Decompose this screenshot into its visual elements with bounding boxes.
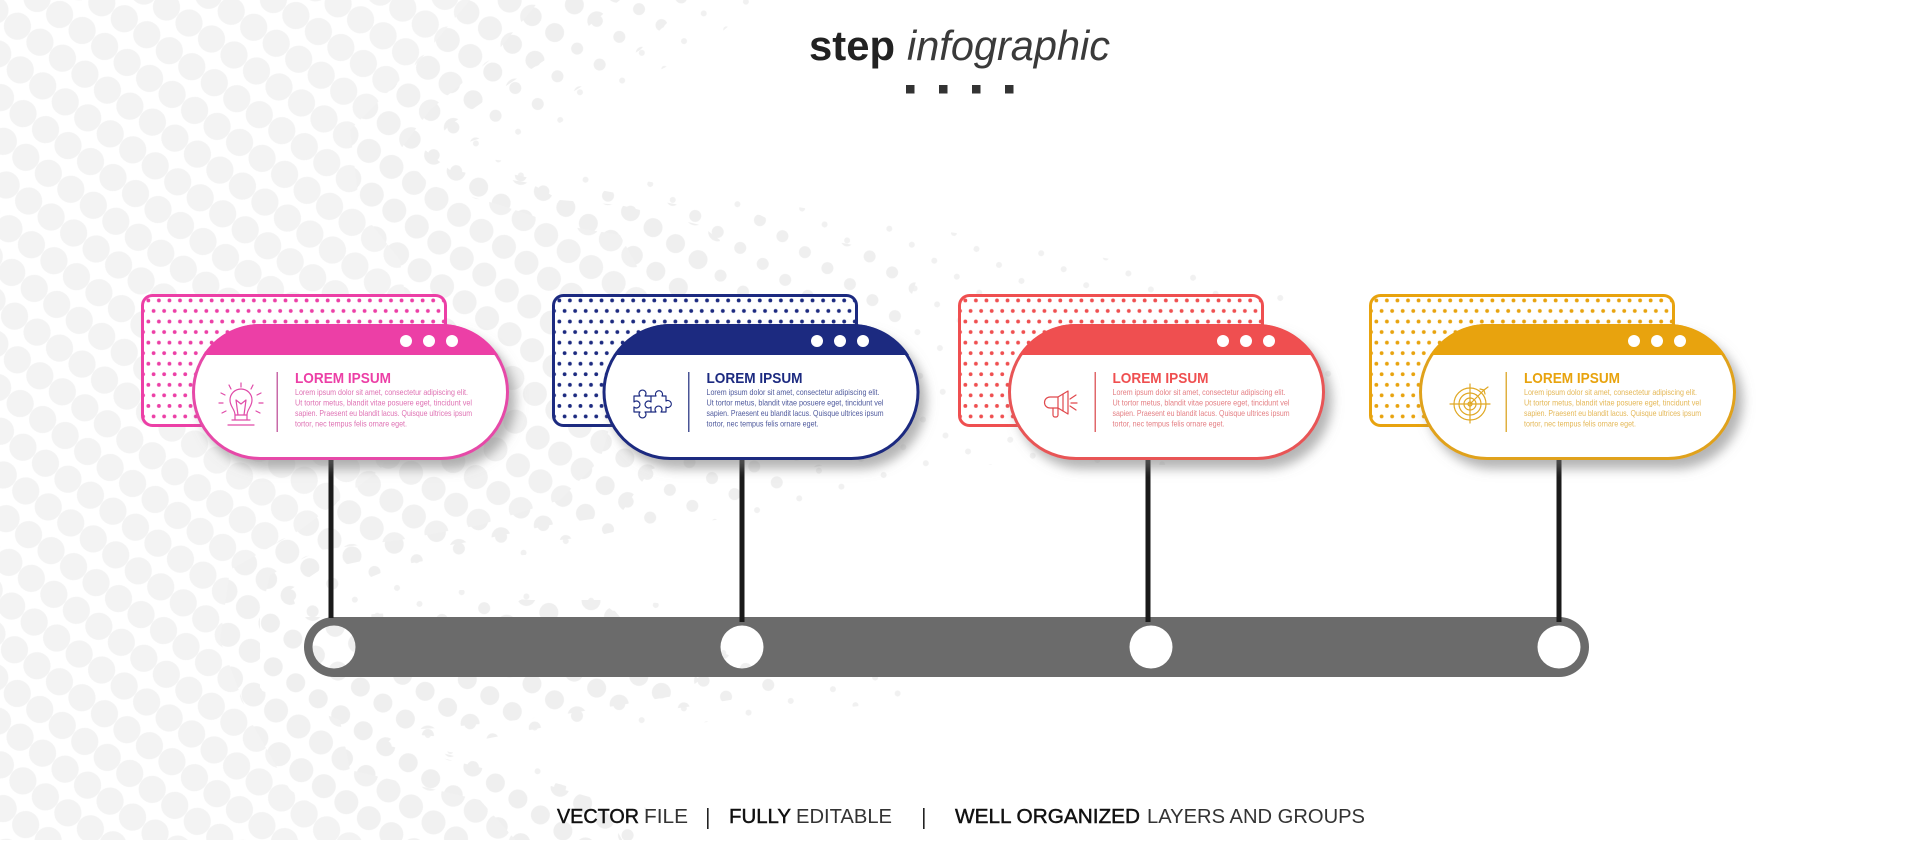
window header <box>1430 324 1725 355</box>
footer tagline: VECTOR <box>557 806 639 828</box>
heading: LOREM IPSUM <box>295 370 391 387</box>
body text: Lorem ipsum dolor sit amet, consectetur adipiscing elit. <box>706 387 880 397</box>
body text: tortor, nec tempus felis ornare eget. <box>295 419 407 429</box>
body text <box>706 387 884 429</box>
dotted back card <box>1370 296 1674 426</box>
timeline bar with four node holes <box>304 617 1589 677</box>
footer tagline: EDITABLE <box>796 806 892 828</box>
body text: sapien. Praesent eu blandit lacus. Quisque ultrices ipsum <box>1112 408 1290 418</box>
window header <box>614 324 909 355</box>
heading: LOREM IPSUM <box>1112 370 1208 387</box>
icon: megaphone <box>1044 391 1077 417</box>
footer tagline: LAYERS AND GROUPS <box>1147 806 1365 828</box>
body text: Ut tortor metus, blandit vitae posuere eget, tincidunt vel <box>706 398 884 408</box>
body text: tortor, nec tempus felis ornare eget. <box>1524 419 1636 429</box>
body text: sapien. Praesent eu blandit lacus. Quisque ultrices ipsum <box>1524 408 1701 418</box>
pill card body <box>1420 326 1734 458</box>
title <box>809 22 1110 69</box>
body text: Ut tortor metus, blandit vitae posuere eget, tincidunt vel <box>295 398 472 408</box>
body text: Ut tortor metus, blandit vitae posuere eget, tincidunt vel <box>1524 398 1701 408</box>
panel: step 2 navy <box>554 296 918 458</box>
window header <box>203 324 498 355</box>
pill card body <box>1010 326 1324 458</box>
icon: light bulb <box>219 383 263 425</box>
heading: LOREM IPSUM <box>1524 370 1620 387</box>
window dots <box>1217 335 1275 347</box>
dotted back card <box>142 296 446 426</box>
body text <box>1524 387 1701 429</box>
pill card body <box>604 326 918 458</box>
body text: sapien. Praesent eu blandit lacus. Quisque ultrices ipsum <box>295 408 472 418</box>
window dots <box>1628 335 1686 347</box>
footer tagline: FULLY <box>729 806 791 828</box>
body text: Lorem ipsum dolor sit amet, consectetur adipiscing elit. <box>1524 387 1697 397</box>
panel: step 4 gold <box>1370 296 1734 458</box>
icon: puzzle pieces <box>634 390 671 418</box>
body text <box>295 387 472 429</box>
title: infographic <box>907 22 1110 69</box>
panel: step 1 pink <box>142 296 508 458</box>
divider <box>688 372 690 432</box>
heading: LOREM IPSUM <box>706 370 802 387</box>
footer tagline <box>557 806 1365 829</box>
window header <box>1019 324 1314 355</box>
divider <box>1094 372 1096 432</box>
body text: tortor, nec tempus felis ornare eget. <box>1112 419 1224 429</box>
title marker squares <box>906 85 1014 94</box>
window dots <box>811 335 869 347</box>
connector stems <box>328 455 1562 622</box>
dotted back card <box>554 296 856 426</box>
body text: sapien. Praesent eu blandit lacus. Quisque ultrices ipsum <box>706 408 884 418</box>
divider <box>1506 372 1507 432</box>
title: step <box>809 22 895 69</box>
body text: Lorem ipsum dolor sit amet, consectetur adipiscing elit. <box>295 387 468 397</box>
body text: tortor, nec tempus felis ornare eget. <box>706 419 818 429</box>
pill card body <box>194 326 508 458</box>
divider <box>276 372 278 432</box>
dotted back card <box>960 296 1262 426</box>
panel: step 3 red <box>960 296 1324 458</box>
footer tagline: FILE <box>644 806 688 828</box>
icon: target <box>1450 384 1490 423</box>
window dots <box>400 335 458 347</box>
body text: Ut tortor metus, blandit vitae posuere eget, tincidunt vel <box>1112 398 1290 408</box>
body text <box>1112 387 1290 429</box>
body text: Lorem ipsum dolor sit amet, consectetur adipiscing elit. <box>1112 387 1286 397</box>
footer tagline: WELL ORGANIZED <box>955 806 1140 828</box>
